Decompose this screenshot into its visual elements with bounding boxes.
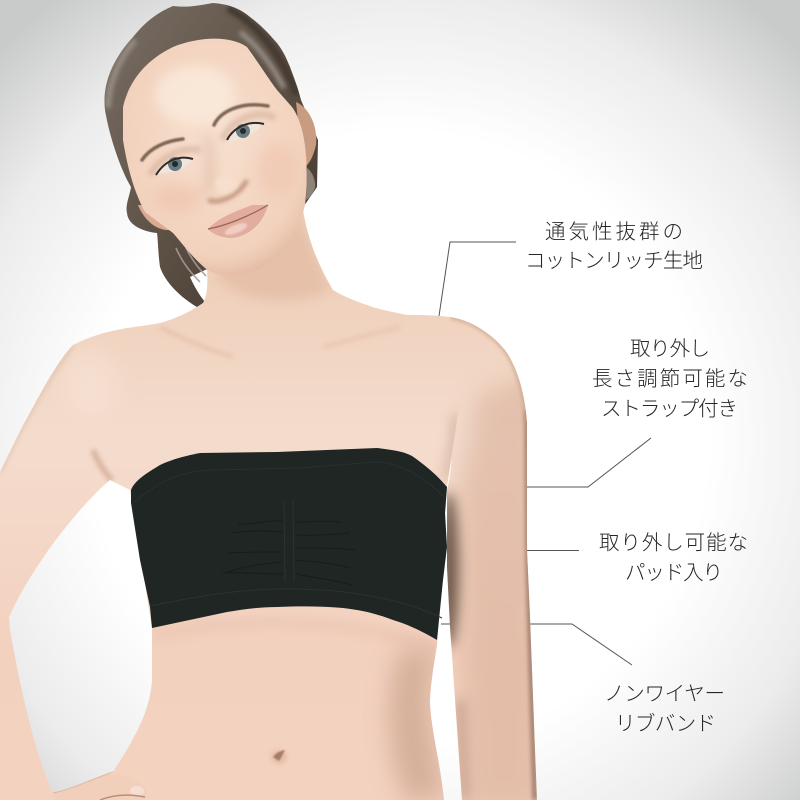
label: removable adjustable straps: 長さ調節可能な: [592, 368, 748, 390]
lips: [208, 205, 268, 238]
left eye: [156, 157, 193, 175]
label: removable pads: 取り外し可能な: [599, 532, 748, 554]
body shading: [0, 215, 456, 800]
label: removable pads: [599, 532, 748, 584]
label: non-wire rib band: [604, 682, 725, 736]
face shading: [157, 184, 200, 210]
label: removable adjustable straps: [592, 338, 748, 420]
arm shading: [447, 317, 537, 800]
label: removable adjustable straps: ストラップ付き: [601, 398, 738, 420]
label: removable adjustable straps: 取り外し: [630, 338, 710, 360]
left ear: [138, 205, 170, 230]
label: breathable cotton-rich fabric: コットンリッチ生地: [525, 250, 703, 272]
navel: [271, 750, 287, 764]
neck and torso: [0, 210, 480, 800]
right arm: [438, 317, 537, 800]
model body: [0, 210, 545, 800]
hair back with bun: [104, 3, 318, 307]
strapless bra: [131, 448, 447, 640]
leader lines: [439, 242, 651, 665]
label: non-wire rib band: リブバンド: [615, 712, 716, 736]
label: non-wire rib band: ノンワイヤー: [604, 682, 725, 706]
face: [123, 38, 307, 274]
label: breathable cotton-rich fabric: 通気性抜群の: [545, 220, 683, 244]
nose: [208, 175, 247, 201]
hand on hip: [53, 772, 146, 800]
bra seams and ruching: [135, 462, 444, 618]
eyebrows: [142, 105, 268, 160]
label: removable pads: パッド入り: [625, 562, 723, 584]
right ear: [296, 102, 316, 168]
label: breathable cotton-rich fabric: [525, 220, 703, 272]
right eye: [227, 123, 264, 142]
